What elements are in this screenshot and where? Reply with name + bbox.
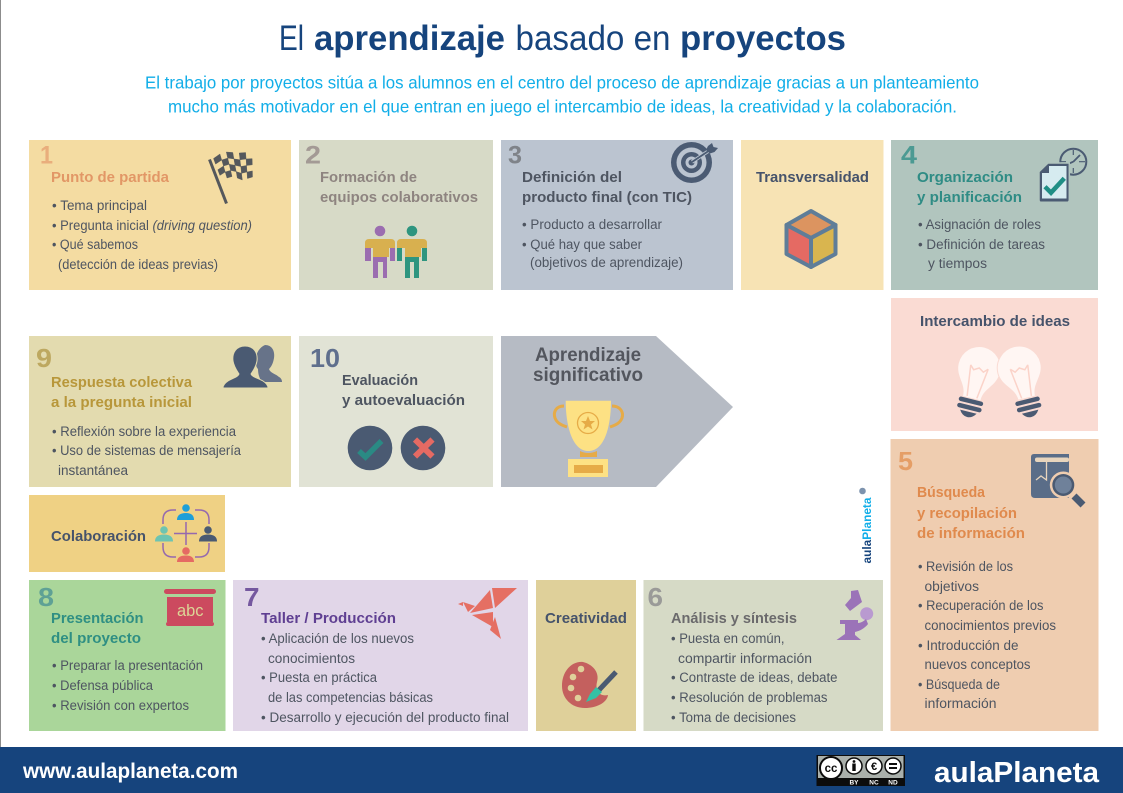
panel: 9 respuesta colectiva	[29, 336, 291, 487]
list: respuesta colectiva	[52, 424, 241, 478]
list: punto de partida: • Pregunta inicial (driving question)	[52, 218, 252, 233]
icon: cube	[786, 211, 836, 267]
list: taller	[261, 631, 509, 725]
panel: 7 taller	[233, 580, 528, 731]
panel: 5 búsqueda	[890, 439, 1098, 731]
heading: aprendizaje significativo	[533, 344, 643, 386]
heading: búsqueda: Búsqueda	[917, 484, 986, 501]
number 1: 1	[40, 142, 53, 170]
list: taller: de las competencias básicas	[268, 690, 433, 705]
icon: creative commons badge: cc	[825, 763, 838, 775]
icon: trophy	[554, 401, 623, 477]
subtitle	[145, 72, 979, 116]
list: producto: • Producto a desarrollar	[522, 217, 662, 232]
heading: respuesta colectiva: Respuesta colectiva	[51, 374, 193, 391]
number 7: 7	[244, 582, 260, 612]
heading: formación de equipos: Formación de	[320, 169, 417, 186]
panel: 10 evaluación	[299, 336, 493, 487]
icon: check	[348, 426, 392, 470]
title: El	[279, 19, 304, 58]
list: organización: y tiempos	[928, 256, 987, 271]
icon: creative commons badge: NC	[869, 780, 879, 786]
icon: collaboration network	[155, 504, 217, 562]
panel: 2 equipos colaborativos	[299, 140, 493, 290]
icon: two silhouettes	[223, 345, 282, 388]
list: búsqueda: • Recuperación de los	[918, 598, 1044, 613]
number 5: 5	[898, 446, 913, 476]
title: basado en	[516, 19, 670, 58]
number 10: 10	[310, 343, 340, 373]
list: búsqueda: información	[924, 696, 996, 711]
number 6: 6	[648, 582, 663, 612]
heading: organización y planificación: y planificación	[917, 189, 1022, 206]
footer bar	[0, 747, 1123, 793]
number 4: 4	[901, 142, 917, 170]
number 2: 2	[305, 142, 321, 170]
heading: evaluación	[342, 372, 465, 409]
panel: transversalidad	[741, 140, 884, 290]
heading: presentación del proyecto: del proyecto	[51, 630, 141, 647]
icon: target	[671, 142, 718, 183]
list: búsqueda	[918, 559, 1056, 711]
panel: colaboración	[29, 495, 225, 572]
icon: cross	[401, 426, 445, 470]
heading: búsqueda: de información	[917, 525, 1025, 542]
number 8: 8	[38, 582, 54, 612]
heading: respuesta colectiva	[51, 374, 193, 411]
list: punto de partida: (detección de ideas previas)	[58, 257, 218, 272]
list: búsqueda: • Búsqueda de	[918, 677, 1000, 692]
list: punto de partida	[52, 198, 252, 272]
list: análisis: • Contraste de ideas, debate	[671, 670, 838, 685]
footer logo: aulaPlaneta	[934, 757, 1100, 789]
list: respuesta colectiva: • Uso de sistemas de mensajería	[52, 443, 241, 458]
heading: creatividad: Creatividad	[545, 610, 627, 627]
number 9: 9	[36, 343, 52, 373]
heading: punto de partida: Punto de partida	[51, 169, 170, 186]
heading: formación de equipos: equipos colaborativos	[320, 189, 478, 206]
panel: creatividad	[536, 580, 636, 731]
title: aprendizaje	[314, 19, 505, 58]
list: presentación: • Preparar la presentación	[52, 658, 203, 673]
icon: microscope	[836, 590, 873, 640]
list: análisis	[671, 631, 838, 725]
heading: aprendizaje significativo: significativo	[533, 364, 643, 386]
list: respuesta colectiva: • Reflexión sobre la experiencia	[52, 424, 236, 439]
footer url: www.aulaplaneta.com	[22, 760, 238, 783]
title	[279, 19, 846, 58]
subtitle: El trabajo por proyectos sitúa a los alumnos en el centro del proceso de aprendizaje gracias a un planteamiento	[145, 72, 979, 92]
list: presentación	[52, 658, 203, 713]
heading: transversalidad: Transversalidad	[756, 169, 869, 186]
list: presentación: • Defensa pública	[52, 678, 153, 693]
heading: organización y planificación: Organización	[917, 169, 1013, 186]
heading: presentación del proyecto	[51, 610, 144, 647]
list: organización: • Asignación de roles	[918, 217, 1041, 232]
heading: evaluación: y autoevaluación	[342, 392, 465, 409]
icon: blackboard abc: abc	[177, 601, 204, 620]
logo: vertical aulaPlaneta: aulaPlaneta	[860, 497, 874, 564]
icon: creative commons badge: BY	[849, 780, 859, 786]
list: presentación: • Revisión con expertos	[52, 698, 189, 713]
list: punto de partida: • Qué sabemos	[52, 237, 138, 252]
list: producto: • Qué hay que saber	[522, 237, 642, 252]
heading: formación de equipos	[320, 169, 478, 206]
list: análisis: • Puesta en común,	[671, 631, 784, 646]
heading: colaboración: Colaboración	[51, 528, 146, 545]
heading: búsqueda	[917, 484, 1025, 542]
panel: 8 presentación	[29, 580, 226, 731]
icon: creative commons badge	[816, 755, 905, 786]
heading: definición del producto: Definición del	[522, 169, 622, 186]
heading: taller / producción: Taller / Producción	[261, 610, 396, 627]
list: taller: • Aplicación de los nuevos	[261, 631, 414, 646]
icon: palette	[562, 662, 616, 708]
list: taller: • Puesta en práctica	[261, 670, 377, 685]
panel: 1 punto de partida	[29, 140, 291, 290]
panel: 6 análisis	[644, 580, 883, 731]
list: producto: (objetivos de aprendizaje)	[530, 255, 683, 270]
list: organización: • Definición de tareas	[918, 237, 1045, 252]
heading: respuesta colectiva: a la pregunta inicial	[51, 394, 192, 411]
heading: presentación del proyecto: Presentación	[51, 610, 144, 627]
icon: checkered flag	[210, 152, 252, 204]
list: punto de partida: • Tema principal	[52, 198, 147, 213]
heading: organización y planificación	[917, 169, 1022, 206]
icon: two people	[365, 226, 427, 278]
icon: light bulbs	[947, 341, 1053, 422]
heading: definición del producto	[522, 169, 692, 206]
icon: book and magnifier	[1031, 454, 1083, 505]
list: búsqueda: • Introducción de	[918, 638, 1018, 653]
panel: 3 definición del producto	[501, 140, 733, 290]
heading: análisis y síntesis: Análisis y síntesis	[671, 610, 797, 627]
icon: creative commons badge: ND	[888, 780, 898, 786]
heading: intercambio de ideas: Intercambio de ideas	[920, 313, 1070, 330]
panel: aprendizaje significativo arrow	[501, 336, 733, 487]
list: taller: • Desarrollo y ejecución del producto final	[261, 710, 509, 725]
subtitle: mucho más motivador en el que entran en juego el intercambio de ideas, la creatividad y la colaboración.	[168, 96, 957, 116]
list: taller: conocimientos	[268, 651, 355, 666]
number 3: 3	[508, 142, 522, 170]
list: respuesta colectiva: instantánea	[58, 463, 128, 478]
list: análisis: compartir información	[678, 651, 812, 666]
list: análisis: • Resolución de problemas	[671, 690, 828, 705]
panel: 4 organización	[891, 140, 1098, 290]
heading: definición del producto: producto final (con TIC)	[522, 189, 692, 206]
heading: búsqueda: y recopilación	[917, 505, 1017, 522]
icon: origami bird	[458, 588, 517, 639]
list: organización	[918, 217, 1045, 271]
panel: intercambio de ideas	[891, 298, 1098, 431]
list: búsqueda: objetivos	[924, 579, 979, 594]
list: análisis: • Toma de decisiones	[671, 710, 796, 725]
icon: blackboard abc	[164, 589, 216, 626]
list: búsqueda: nuevos conceptos	[924, 657, 1031, 672]
list: búsqueda: • Revisión de los	[918, 559, 1013, 574]
heading: aprendizaje significativo: Aprendizaje	[535, 344, 641, 366]
list: producto	[522, 217, 683, 270]
icon: creative commons badge: €	[871, 761, 877, 773]
title: proyectos	[680, 19, 846, 58]
list: búsqueda: conocimientos previos	[924, 618, 1056, 633]
icon: clipboard and clock	[1039, 149, 1086, 202]
heading: evaluación: Evaluación	[342, 372, 418, 389]
